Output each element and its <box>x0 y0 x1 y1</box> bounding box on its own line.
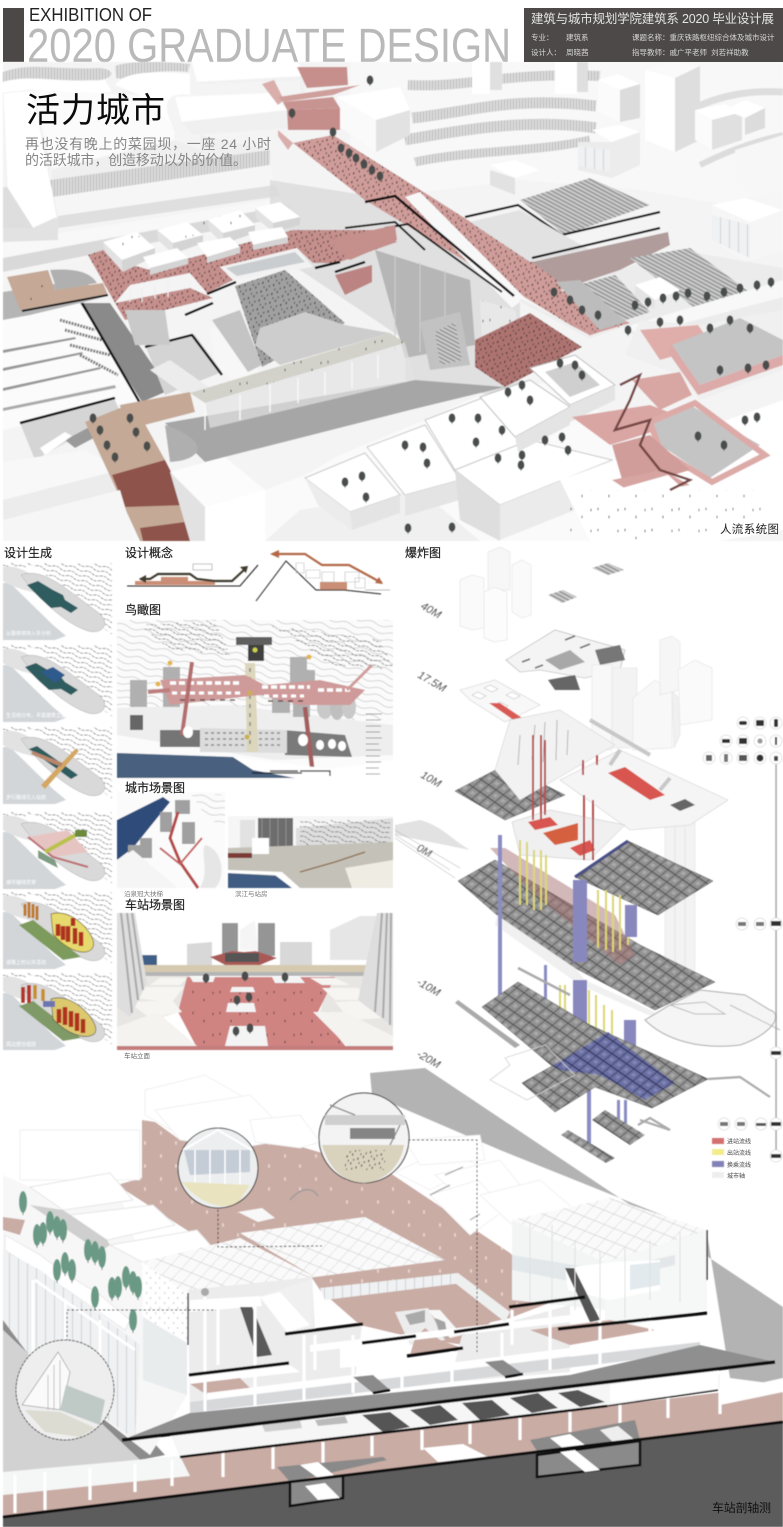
panel: aerial view <box>117 620 395 779</box>
top towers <box>460 547 531 642</box>
lower white terraces <box>170 355 783 541</box>
level 17.5M upper plate <box>460 630 625 728</box>
thumbnail 6 <box>3 973 112 1050</box>
subway section pink <box>3 1385 783 1517</box>
concept left section <box>127 564 258 586</box>
river <box>117 753 300 778</box>
floor light spots <box>117 1120 557 1330</box>
thumbnail captions: 道路上的公共活动 <box>6 959 46 966</box>
heading: 2020 graduate design: 2020 GRADUATE DESIGN <box>27 20 511 73</box>
header: dark accent bar <box>3 8 24 62</box>
towers <box>236 637 272 645</box>
thumbnail 5 <box>3 892 112 969</box>
panel: people flow axonometric <box>3 62 783 541</box>
section walls <box>3 1378 783 1513</box>
side fill <box>117 976 190 1030</box>
upper left terraces <box>3 62 290 285</box>
level 10M right grid <box>575 841 713 915</box>
level labels: -20M <box>414 1048 443 1072</box>
thumbnail captions: 生活线分布，丰富建筑立面 <box>6 712 66 719</box>
left atrium walls <box>188 1277 362 1412</box>
level 0M platform <box>395 820 780 1046</box>
heading: exhibition of: EXHIBITION OF <box>29 5 152 25</box>
label: people flow: 人流系统图 <box>720 522 779 536</box>
concept right section <box>256 550 390 601</box>
heading: aerial: 鸟瞰图 <box>125 602 161 617</box>
level 10M central plate <box>495 710 728 860</box>
heading: exploded: 爆炸图 <box>405 546 441 560</box>
white retail boxes <box>103 202 300 275</box>
legend labels: 出站流线 <box>727 1149 751 1157</box>
header info panel: 设计人： <box>531 47 561 57</box>
level -10M grid <box>455 968 770 1130</box>
crowds at bottom right <box>570 490 770 535</box>
rail level with dark tracks <box>170 1368 720 1457</box>
header info panel: 课题名称：重庆铁路枢纽综合体及城市设计 <box>632 32 775 42</box>
subtitle text <box>25 136 271 168</box>
panel: city scene left <box>117 792 225 888</box>
header info panel: 指导教师：戚广平老师 刘若祥助教 <box>632 47 749 57</box>
pink plaza floor <box>178 977 347 1048</box>
tan entrance <box>120 392 195 430</box>
central sunken court with crowd <box>125 248 345 395</box>
thumbnail 2 <box>3 645 112 722</box>
white blocks left <box>150 978 187 985</box>
rail yard <box>117 705 393 760</box>
level labels: 17.5M <box>416 669 449 695</box>
dashed callout leaders <box>67 1140 477 1355</box>
pink main deck <box>88 222 425 320</box>
panel: design generation thumbnails <box>3 563 112 1050</box>
dark pink plaza <box>475 280 630 387</box>
roof grids <box>592 563 624 575</box>
pink main floor <box>117 1120 557 1338</box>
header info panel: 建筑与城市规划学院建筑系 2020 毕业设计展 <box>531 11 774 26</box>
icon glyphs <box>706 719 781 1158</box>
left railway tracks <box>3 280 150 541</box>
detail circle: concourse <box>319 1093 409 1183</box>
yellow marks <box>168 660 172 666</box>
left gray road <box>3 1287 165 1460</box>
header info panel: 周晓茜 <box>566 47 589 57</box>
label: section axonometric: 车站剖轴测 <box>712 1500 771 1515</box>
right glass pavilion <box>512 1198 707 1330</box>
tall white building at bottom <box>170 457 265 541</box>
panel: station section axonometric <box>3 1068 783 1527</box>
legend labels: 城市轴 <box>727 1172 745 1180</box>
legend labels: 换乘流线 <box>727 1161 751 1169</box>
right halls with seating rows <box>465 178 783 338</box>
captions for city scenes: 滨江与站房 <box>235 889 268 898</box>
panel: station scene <box>117 913 393 1050</box>
subway concourse gray <box>277 1457 387 1482</box>
legend labels: 进站流线 <box>727 1138 751 1146</box>
icon group: circles <box>703 717 782 1162</box>
thumbnail captions: 城市轴线贯穿 <box>6 879 36 886</box>
central atrium <box>320 1273 510 1355</box>
glass atrium <box>270 180 520 400</box>
yellow columns <box>520 840 628 1050</box>
trees on strip <box>632 277 774 311</box>
red pedestrian network <box>160 675 365 705</box>
detail circle: roof interior <box>178 1128 258 1208</box>
level labels <box>414 600 449 1072</box>
level -20M grids <box>592 1110 645 1145</box>
level labels: 40M <box>418 600 444 622</box>
thumbnail 1 <box>3 563 112 640</box>
central roof grids <box>240 1217 445 1277</box>
platform canopy <box>122 1345 775 1440</box>
right pink stepped terraces <box>572 310 783 515</box>
heading: city scenes: 城市场景图 <box>125 780 185 795</box>
header info panel: 专业： <box>531 32 554 42</box>
level labels: -10M <box>414 976 443 1000</box>
title: vital city: 活力城市 <box>26 92 165 130</box>
pink tower and diagonal walkway <box>262 67 630 337</box>
pink side openings <box>235 1187 345 1220</box>
header info panel: 建筑系 <box>566 32 589 42</box>
dark track deck <box>80 303 170 402</box>
thumbnail captions: 步行路线引入站前 <box>6 794 46 801</box>
thumbnail captions: 周边居住组团 <box>6 1041 36 1048</box>
left terraced building and trees <box>3 1173 213 1455</box>
aerial legend <box>366 714 382 774</box>
subway boxes <box>290 1441 640 1506</box>
purple columns <box>498 835 637 1143</box>
stair blocks <box>353 1360 523 1393</box>
detail circle: facade <box>16 1340 114 1440</box>
red columns <box>533 735 597 860</box>
upper right terraces <box>350 62 783 215</box>
legend labels <box>727 1138 751 1180</box>
thumbnail 4 <box>3 812 112 889</box>
bottom tan and brick walkway <box>85 408 205 541</box>
light elevated deck <box>190 312 415 430</box>
tan bridge <box>7 270 108 311</box>
thumbnail 3 <box>3 727 112 804</box>
heading: concept: 设计概念 <box>125 545 173 560</box>
level labels: 10M <box>418 769 444 791</box>
white plaza building cut <box>3 490 135 541</box>
panel: exploded axonometric <box>395 547 780 1163</box>
subtitle text: 再也没有晚上的菜园坝，一座 24 小时 <box>25 136 271 152</box>
floor plates and columns <box>190 1297 700 1413</box>
dark ground <box>3 1422 783 1527</box>
right bay walls <box>450 1305 570 1382</box>
panel: city scene right <box>228 816 393 888</box>
background city <box>330 916 377 960</box>
level 10M left grid <box>455 765 565 820</box>
captions for city scenes <box>124 889 268 898</box>
road <box>165 380 505 462</box>
white blocks right <box>310 978 350 985</box>
white upper boxes <box>20 1075 575 1235</box>
header info panel <box>524 8 783 62</box>
panel: concept diagrams <box>127 550 390 601</box>
thumbnail captions <box>6 630 66 1048</box>
legend <box>712 1138 724 1178</box>
subtitle text: 的活跃城市，创造移动以外的价值。 <box>25 152 247 168</box>
side towers <box>117 913 147 1017</box>
right gray road <box>370 1068 783 1385</box>
captions for city scenes: 沿泉冠大扶梯 <box>124 889 164 898</box>
white buildings upper <box>175 62 783 200</box>
heading: station scenes: 车站场景图 <box>125 897 185 912</box>
caption: station elevation: 车站立面 <box>124 1051 150 1060</box>
tree pads <box>230 987 255 992</box>
thumbnail captions: 从整体地块入手分析 <box>6 630 51 637</box>
black slabs <box>189 1297 707 1375</box>
flow icons and timeline <box>703 717 782 1178</box>
right towers mid <box>592 636 712 985</box>
heading: design generation: 设计生成 <box>4 546 52 560</box>
level labels: 0M <box>414 842 434 861</box>
